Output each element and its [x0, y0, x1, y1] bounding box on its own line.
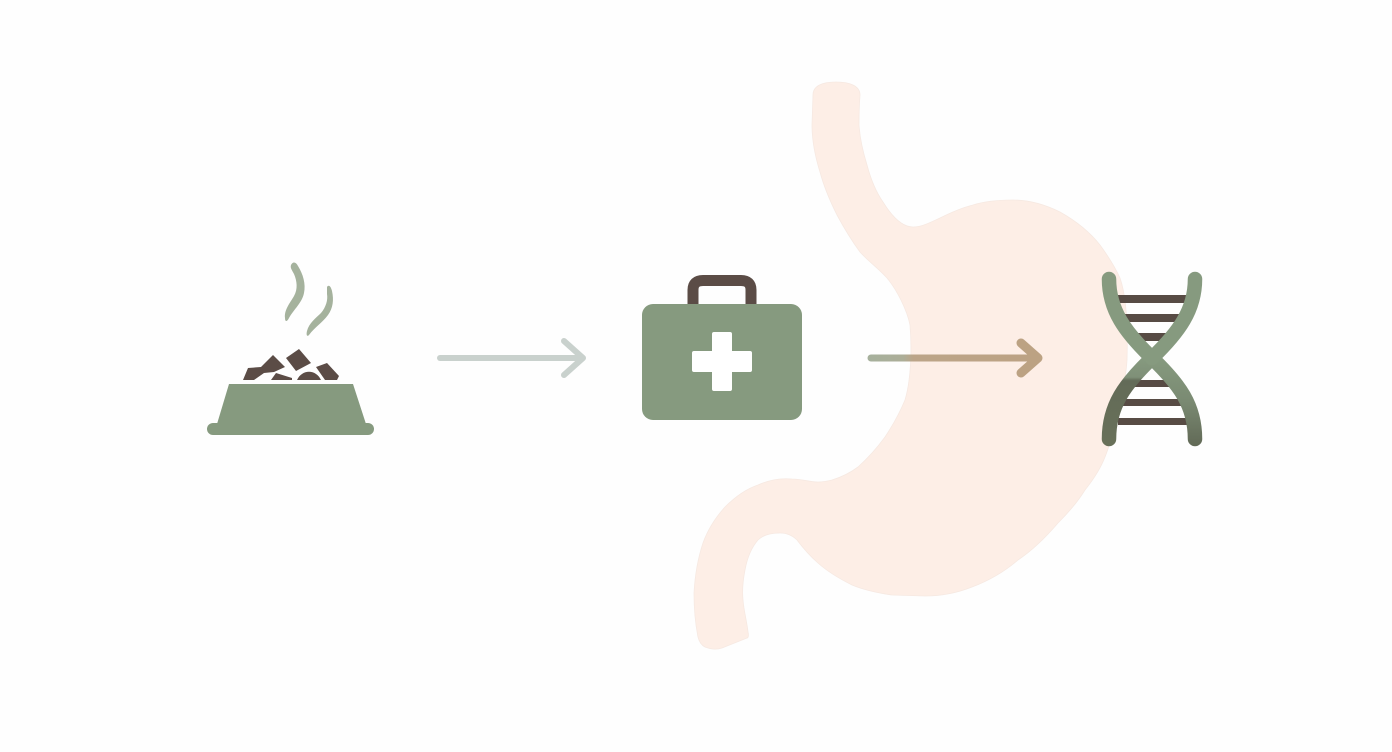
icon: medical kit: [642, 280, 802, 420]
bowl rim: [207, 423, 374, 435]
bowl body: [217, 384, 366, 424]
cross: [692, 332, 752, 391]
arrow: food to medical kit: [440, 341, 583, 375]
steam: [285, 262, 333, 336]
kibble: [243, 349, 339, 380]
icon: DNA helix: [1109, 279, 1195, 439]
rungs: [1118, 295, 1187, 425]
icon: food bowl: [207, 262, 374, 435]
case: [642, 304, 802, 420]
handle: [693, 280, 751, 305]
arrow: medical kit to DNA: [871, 343, 1038, 373]
strands: [1109, 279, 1195, 439]
stomach: [694, 82, 1127, 649]
